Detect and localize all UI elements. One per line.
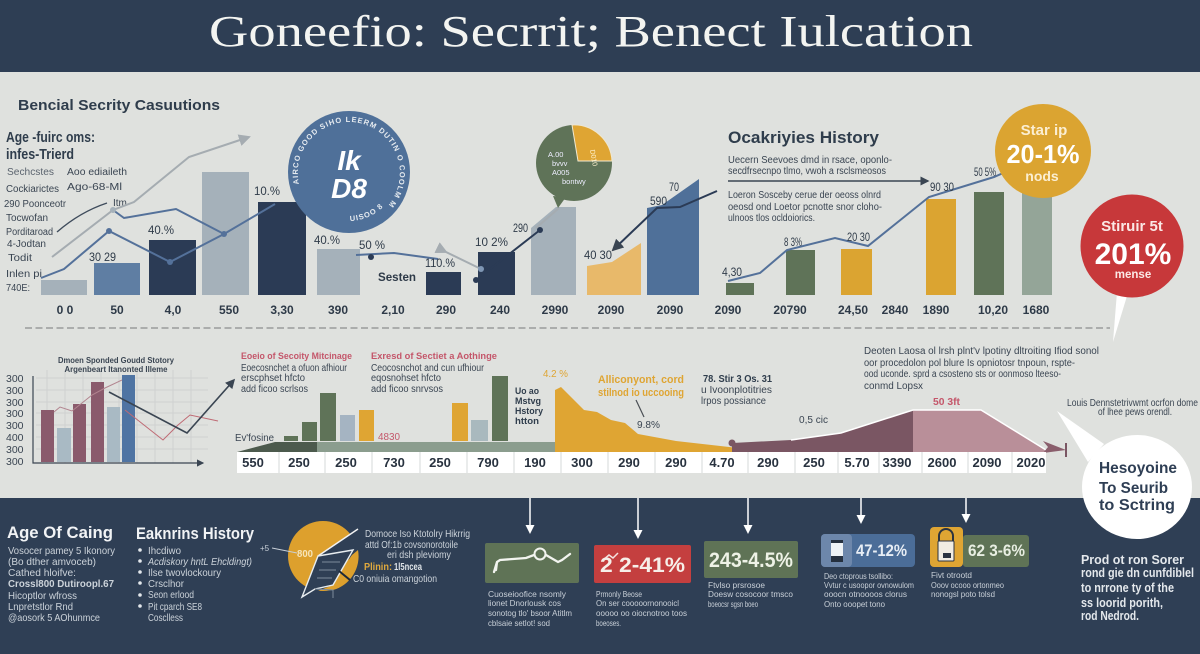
- stat 5 caption: Ooov ocooo ortonmeo: [931, 580, 1004, 590]
- stat 5 caption: Fivt otrootd: [931, 570, 972, 580]
- text block: age factors: Todit: [8, 253, 32, 264]
- footer text: age of caring: @aosork 5 AOhunmce: [8, 612, 100, 624]
- x axis labels: [57, 303, 1050, 317]
- x axis labels: 390: [328, 303, 348, 317]
- footer text: age of caring: Age Of Caing: [7, 523, 113, 542]
- text block: bubble note: of lhee pews orendl.: [1098, 407, 1172, 418]
- value labels: 40.%: [314, 235, 340, 247]
- value table row: 250: [429, 455, 451, 470]
- footer text: pie note: 1l5ncea: [394, 562, 422, 573]
- header band with title: [0, 0, 1200, 72]
- white speech bubble: Hesoyoine: [1099, 460, 1177, 477]
- x axis labels: 20790: [773, 303, 807, 317]
- footer text: pie note: attd Of:1b covsonorotoile: [365, 539, 458, 551]
- text block: age factors: Sechcstes: [7, 167, 54, 178]
- trend lines: [41, 137, 1010, 283]
- footer text: earnings history list: Seon erlood: [148, 589, 194, 601]
- small line chart with bars: 300: [6, 420, 24, 432]
- stat box 2: red: 2 2-41%: [600, 554, 685, 577]
- pie callout: green and orange: bontwy: [562, 177, 586, 186]
- text block: top right paragraph: ood uconde. sprd a csosteno sts or oonmoso lteeso-: [864, 369, 1061, 380]
- value table row: 250: [803, 455, 825, 470]
- stat 2 caption: [596, 589, 687, 628]
- stat 1 caption: Cuoseioofice nsomly: [488, 589, 567, 599]
- x axis labels: 1680: [1023, 303, 1050, 317]
- text block: history: ulnoos tlos ocldoiorics.: [728, 213, 815, 224]
- small line chart with bars: 300: [6, 444, 24, 456]
- timeline small bars: 4830: [378, 431, 400, 443]
- stat 4 caption: [824, 571, 914, 609]
- bar chart: left top: [41, 172, 1052, 295]
- badge: yellow circle: [995, 104, 1091, 198]
- stat box 3: green: 243-4.5%: [709, 549, 793, 572]
- text block: middle notes: Alliconyont, cord: [598, 374, 684, 386]
- stat 1 caption: cblsaie setlot! sod: [488, 618, 550, 628]
- text block: middle notes: 9.8%: [637, 420, 660, 431]
- footer right text: ss loorid porith,: [1081, 596, 1163, 610]
- text block: middle notes: 0,5 cic: [799, 415, 828, 426]
- value table row: 190: [524, 455, 546, 470]
- footer text: age of caring: Cathed hloifve:: [8, 567, 76, 579]
- stat box 5: green with lock icon: [930, 527, 1029, 567]
- stat 1 caption: [488, 589, 572, 628]
- text block: age factors: Age -fuirc oms:: [6, 129, 95, 146]
- x axis labels: 2,10: [381, 303, 405, 317]
- value table row: 4.70: [709, 455, 735, 470]
- value labels: 30 29: [89, 252, 116, 264]
- stat box 1: green squiggle: [485, 543, 579, 583]
- text block: red heading left: erscphset hfcto: [241, 373, 305, 384]
- stat box 4: blue with phone icon: 47-12%: [856, 541, 907, 560]
- value labels: 50 5%: [974, 167, 996, 179]
- value labels: 4,30: [722, 267, 742, 279]
- x axis labels: 2990: [542, 303, 569, 317]
- text block: middle notes: [515, 369, 960, 431]
- pie callout: green and orange: [536, 125, 612, 208]
- x axis labels: 290: [436, 303, 456, 317]
- footer pie chart with document icon: 800: [297, 548, 313, 560]
- stat 2 caption: ooooo oo oiocnotroo toos: [596, 608, 687, 618]
- x axis labels: 50: [110, 303, 124, 317]
- stat 3 caption: [708, 580, 793, 609]
- down arrows: [530, 498, 966, 536]
- footer pie chart with document icon: +5: [260, 544, 270, 553]
- x axis labels: 3,30: [270, 303, 294, 317]
- value table row: 550: [242, 455, 264, 470]
- footer right text: Prod ot ron Sorer: [1081, 553, 1184, 567]
- value labels: 40 30: [584, 250, 612, 262]
- text block: bubble note: [1067, 398, 1198, 418]
- text block: age factors: 740E:: [6, 283, 30, 294]
- value table row: 250: [288, 455, 310, 470]
- badge: yellow circle: nods: [1025, 168, 1059, 184]
- small line chart with bars: 300: [6, 408, 24, 420]
- text block: red heading right: add ficoo snrvsos: [371, 384, 443, 395]
- footer text: age of caring: Hicoptlor wfross: [8, 590, 77, 602]
- white speech bubble: to Sctring: [1099, 497, 1175, 514]
- footer text: earnings history list: [136, 524, 254, 624]
- value labels: 110.%: [425, 258, 455, 270]
- orange area: [555, 387, 738, 452]
- stat 5 caption: [931, 570, 1004, 599]
- x axis labels: 550: [219, 303, 239, 317]
- x axis labels: 0 0: [57, 303, 74, 317]
- text block: age factors: infes-Trierd: [6, 146, 74, 163]
- small line chart with bars: 300: [6, 397, 24, 409]
- timeline small bars: Ev'fosine: [235, 433, 274, 444]
- badge: red circle: [1080, 194, 1184, 342]
- value labels: 290: [513, 223, 528, 235]
- text block: middle notes: 50 3ft: [933, 396, 960, 408]
- text block: middle notes: Mstvg: [515, 396, 541, 407]
- pie callout: green and orange: D010: [588, 149, 598, 167]
- text block: age factors: Cockiarictes: [6, 184, 59, 195]
- footer right text: to nrrone ty of the: [1081, 581, 1174, 595]
- stat 1 caption: lionet Dnorlousk cos: [488, 598, 561, 608]
- value labels: 8 3%: [784, 237, 802, 249]
- footer text: earnings history list: Ihcdiwo: [148, 545, 181, 557]
- small line chart with bars: Argenbeart Itanonted Illeme: [64, 364, 168, 374]
- text block: top right paragraph: [864, 346, 1099, 392]
- value table row: 730: [383, 455, 405, 470]
- text block: history: oeosd ond Loetor pcnotte snor cloho-: [728, 202, 882, 213]
- text block: history: Uecern Seevoes dmd in rsace, oponlo-: [728, 155, 892, 166]
- text block: history: [728, 155, 892, 224]
- value labels: Sesten: [378, 272, 416, 284]
- x axis labels: 2090: [657, 303, 684, 317]
- footer text: pie note: Domoce Iso Ktotolry Hikrrig: [365, 528, 470, 540]
- stat box 5: green with lock icon: 62 3-6%: [968, 541, 1025, 560]
- text block: middle notes: 4.2 %: [543, 369, 568, 380]
- text block: age factors: Itm: [113, 198, 127, 209]
- footer right text: rod Nedrod.: [1081, 609, 1139, 623]
- footer right text: [1081, 553, 1194, 623]
- timeline band: [237, 442, 555, 452]
- badge: red circle: mense: [1115, 269, 1151, 281]
- stat 3 caption: Ftvlso prsrosoe: [708, 580, 765, 590]
- text block: top right paragraph: Deoten Laosa ol lrsh plnt'v lpotiny dltroiting Ifiod sonol: [864, 346, 1099, 357]
- small line chart with bars: 400: [6, 432, 24, 444]
- footer text: pie note: eri dsh pleviomy: [387, 549, 452, 561]
- text block: red heading left: add ficoo scrlsos: [241, 384, 308, 395]
- text block: middle notes: u Ivoonplotitries: [701, 385, 772, 396]
- text block: middle notes: htton: [515, 416, 539, 427]
- value labels: 10 2%: [475, 237, 508, 249]
- value labels: 40.%: [148, 225, 174, 237]
- footer text: age of caring: (Bo dther amvoceb): [8, 556, 96, 568]
- value table row: 290: [665, 455, 687, 470]
- badge: blue circle: [288, 111, 410, 233]
- x axis labels: 4,0: [165, 303, 182, 317]
- text block: red heading right: Ceocosnchot and cun ufhiour: [371, 363, 485, 374]
- text block: red heading left: Eoecosnchet a ofuon afhiour: [241, 363, 348, 374]
- text block: history: secdfrsecnpo tlmo, vwoh a rsclsmeosos: [728, 166, 886, 177]
- text block: age factors: Ago-68-Ml: [67, 182, 122, 193]
- timeline small bars: [235, 376, 508, 444]
- stat 2 caption: On ser cooooornonooicl: [596, 598, 679, 608]
- pie callout: green and orange: A005: [552, 168, 570, 177]
- text block: history: Loeron Sosceby cerue der oeoss olnrd: [728, 190, 881, 201]
- pie callout: green and orange: bvvv: [552, 159, 568, 168]
- text block: middle notes: lrpos possiance: [701, 396, 766, 407]
- small line chart with bars: Dmoen Sponded Goudd Stotory: [58, 355, 174, 365]
- text block: age factors: Porditaroad: [6, 227, 53, 238]
- value table row: 3390: [883, 455, 911, 470]
- value labels: 50 %: [359, 240, 385, 252]
- x axis labels: 2090: [715, 303, 742, 317]
- value table row: 2020: [1017, 455, 1045, 470]
- stat 4 caption: Vvtur c usoopor ovnowulom: [824, 580, 914, 590]
- text block: age factors: Tocwofan: [6, 213, 48, 224]
- small line chart with bars: [6, 355, 234, 468]
- maroon area with arrow: [728, 410, 1067, 457]
- stat 4 caption: Deo ctoprous tsollibo:: [824, 571, 893, 581]
- text block: age factors: Aoo ediaileth: [67, 167, 127, 178]
- value table row: [237, 452, 1046, 473]
- stat box 2: red: [594, 545, 691, 583]
- badge: yellow circle: 20-1%: [1006, 139, 1080, 169]
- text block: red heading left: Eoeio of Secoity Mitcinage: [241, 351, 352, 362]
- x axis labels: 24,50: [838, 303, 868, 317]
- value labels: [89, 167, 996, 284]
- x axis labels: 240: [490, 303, 510, 317]
- footer text: earnings history list: Crsclhor: [148, 578, 184, 590]
- x axis labels: 10,20: [978, 303, 1008, 317]
- stat 5 caption: nonogsl poto tolsd: [931, 589, 995, 599]
- stat 4 caption: ooocn otnoooos clorus: [824, 589, 907, 599]
- text block: age factors: [4, 129, 127, 294]
- small line chart with bars: 300: [6, 456, 24, 468]
- badge: yellow circle: Star ip: [1021, 122, 1067, 139]
- value table row: 2600: [928, 455, 956, 470]
- value table row: 290: [757, 455, 779, 470]
- badge: blue circle: Ik: [337, 145, 362, 176]
- footer text: age of caring: Crossl800 Dutiroopl.67: [8, 578, 114, 590]
- text block: red heading right: Exresd of Sectiet a Aothinge: [371, 351, 497, 362]
- text block: middle notes: stilnod io uccooing: [598, 387, 684, 399]
- footer band: [0, 498, 1200, 654]
- footer text: earnings history list: Eaknrins History: [136, 524, 254, 543]
- value table row: 5.70: [844, 455, 870, 470]
- footer text: pie note: [353, 528, 470, 585]
- value labels: 70: [669, 182, 679, 194]
- heading: history: Ocakriyies History: [728, 128, 880, 147]
- x axis labels: 2840: [882, 303, 909, 317]
- footer text: earnings history list: Pit cparch SE8: [148, 601, 202, 613]
- text block: age factors: 4-Jodtan: [7, 239, 46, 250]
- text block: top right paragraph: conmd Lopsx: [864, 381, 923, 392]
- pie callout: green and orange: A.00: [548, 150, 563, 159]
- heading: social security: Bencial Secrity Casuutions: [18, 97, 220, 114]
- footer text: age of caring: [7, 523, 116, 624]
- value table row: 2090: [973, 455, 1001, 470]
- text block: red heading left: [241, 351, 352, 395]
- small line chart with bars: 300: [6, 385, 24, 397]
- stat 4 caption: Onto ooopet tono: [824, 599, 885, 609]
- footer text: earnings history list: Ilse twovlockoury: [148, 567, 222, 579]
- badge: blue circle: D8: [331, 173, 367, 204]
- footer text: age of caring: Vosocer pamey 5 Ikonory: [8, 545, 116, 557]
- value labels: 20 30: [847, 232, 870, 244]
- footer text: earnings history list: Cosclless: [148, 612, 183, 624]
- stat box 3: green: [704, 541, 798, 578]
- white speech bubble: To Seurib: [1099, 480, 1168, 497]
- stat 3 caption: Doesw cosocoor tmsco: [708, 589, 793, 599]
- stat 1 caption: sonotog tlo' bsoor Atitlm: [488, 608, 572, 618]
- text block: age factors: 290 Poonceotr: [4, 199, 67, 210]
- small line chart with bars: 300: [6, 373, 24, 385]
- x axis labels: 1890: [923, 303, 950, 317]
- header band with title: Goneefio: Secrrit; Benect Iulcation: [209, 7, 973, 56]
- value table row: 300: [571, 455, 593, 470]
- stat 2 caption: boeoses.: [596, 618, 621, 628]
- text block: top right paragraph: oor procedolon pol blure Is opniotosr tnpoun, rspte-: [864, 358, 1075, 369]
- footer pie chart with document icon: [260, 521, 362, 598]
- badge: red circle: 201%: [1095, 238, 1171, 271]
- x axis labels: 2090: [598, 303, 625, 317]
- value table row: 250: [335, 455, 357, 470]
- text block: middle notes: Hstory: [515, 406, 544, 417]
- stat 3 caption: boeocsr sgsn boeo: [708, 599, 758, 609]
- stat 2 caption: Prmonly Beose: [596, 589, 642, 599]
- value table row: 790: [477, 455, 499, 470]
- badge: red circle: Stiruir 5t: [1101, 218, 1163, 235]
- text block: age factors: Inlen pi: [6, 269, 42, 280]
- value labels: 90 30: [930, 182, 954, 194]
- stat box 4: blue with phone icon: [821, 534, 915, 567]
- value labels: 10.%: [254, 186, 280, 198]
- footer text: earnings history list: Acdiskory hntL Ehcldingt): [147, 556, 252, 568]
- value labels: 590: [650, 196, 667, 208]
- footer text: age of caring: Lnpretstlor Rnd: [8, 601, 73, 613]
- text block: red heading right: [371, 351, 497, 395]
- value table row: 290: [618, 455, 640, 470]
- footer text: pie note: C0 oniuia omangotion: [353, 573, 437, 585]
- text block: middle notes: Uo ao: [515, 386, 539, 397]
- text block: middle notes: 78. Stir 3 Os. 31: [703, 373, 772, 385]
- footer text: pie note: Plinin:: [364, 562, 392, 573]
- white speech bubble: [1057, 411, 1192, 539]
- text block: red heading right: eqosnohset hfcto: [371, 373, 441, 384]
